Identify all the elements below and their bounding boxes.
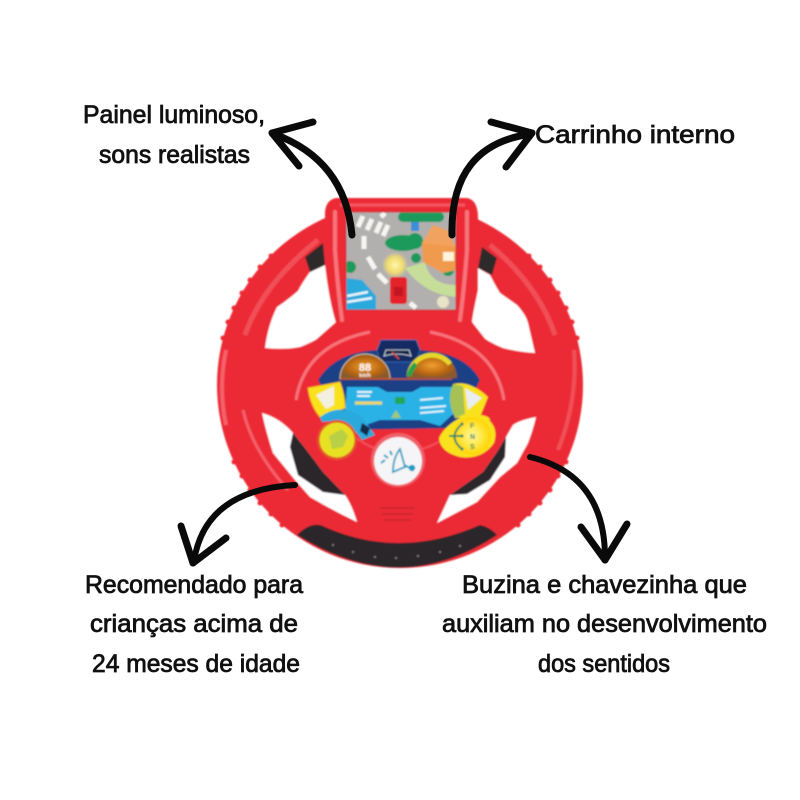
right gauge [407, 353, 457, 378]
label: recomendado para: crianças acima de [90, 610, 298, 638]
black bottom grip [297, 525, 497, 568]
orange house [422, 225, 456, 273]
label: recomendado para: Recomendado para [85, 571, 303, 599]
lower left opening [262, 413, 357, 522]
upper right opening [470, 268, 535, 353]
road markings [358, 213, 416, 308]
small blue figure [411, 222, 419, 231]
left gauge [340, 354, 390, 379]
checker flag strip [320, 410, 375, 440]
screen border [346, 212, 456, 310]
label: buzina e chavezinha: Buzina e chavezinha que [462, 571, 747, 599]
left gauge: 88 [359, 362, 371, 374]
left arrow button [308, 382, 345, 417]
light blue display [345, 387, 453, 427]
arrow: recomendado [181, 485, 295, 563]
right arrow button [450, 383, 488, 418]
arrow: painel luminoso [272, 122, 352, 235]
dashboard housing [318, 342, 480, 430]
green hedges [344, 212, 454, 276]
label: buzina e chavezinha: auxiliam no desenvolvimento [442, 610, 767, 638]
label: carrinho interno: Carrinho interno [535, 121, 735, 149]
arrow: buzina [530, 457, 627, 560]
label: recomendado para: 24 meses de idade [92, 650, 300, 678]
gear selector: S [470, 444, 475, 451]
label: buzina e chavezinha: dos sentidos [538, 650, 670, 678]
speaker grille [380, 508, 415, 520]
steering wheel toy [217, 198, 583, 568]
wheel body [217, 202, 583, 568]
screen panel frame [310, 198, 490, 345]
horn button [371, 433, 425, 487]
speed needle gauge [384, 350, 411, 356]
gear selector: F [470, 423, 475, 430]
label: painel luminoso: Painel luminoso, [83, 101, 265, 129]
blue building [346, 278, 376, 310]
pale corner [437, 296, 449, 308]
upper left dark insert [305, 243, 325, 272]
gear selector [439, 415, 496, 457]
lower right dark insert [450, 437, 506, 495]
lower left dark insert [290, 433, 345, 495]
arrow: carrinho interno [452, 122, 532, 235]
left gauge: km/h [359, 373, 371, 379]
central hub [296, 332, 504, 520]
key button [317, 420, 357, 460]
play screen map [344, 212, 456, 310]
red car [390, 277, 407, 304]
label: painel luminoso: sons realistas [99, 141, 250, 169]
upper left opening [265, 265, 336, 349]
gear selector: N [470, 434, 475, 441]
upper right dark insert [478, 247, 497, 275]
yellow light [382, 252, 408, 278]
grass [405, 262, 456, 297]
lower right opening [437, 417, 536, 523]
gauge divider [340, 378, 452, 380]
